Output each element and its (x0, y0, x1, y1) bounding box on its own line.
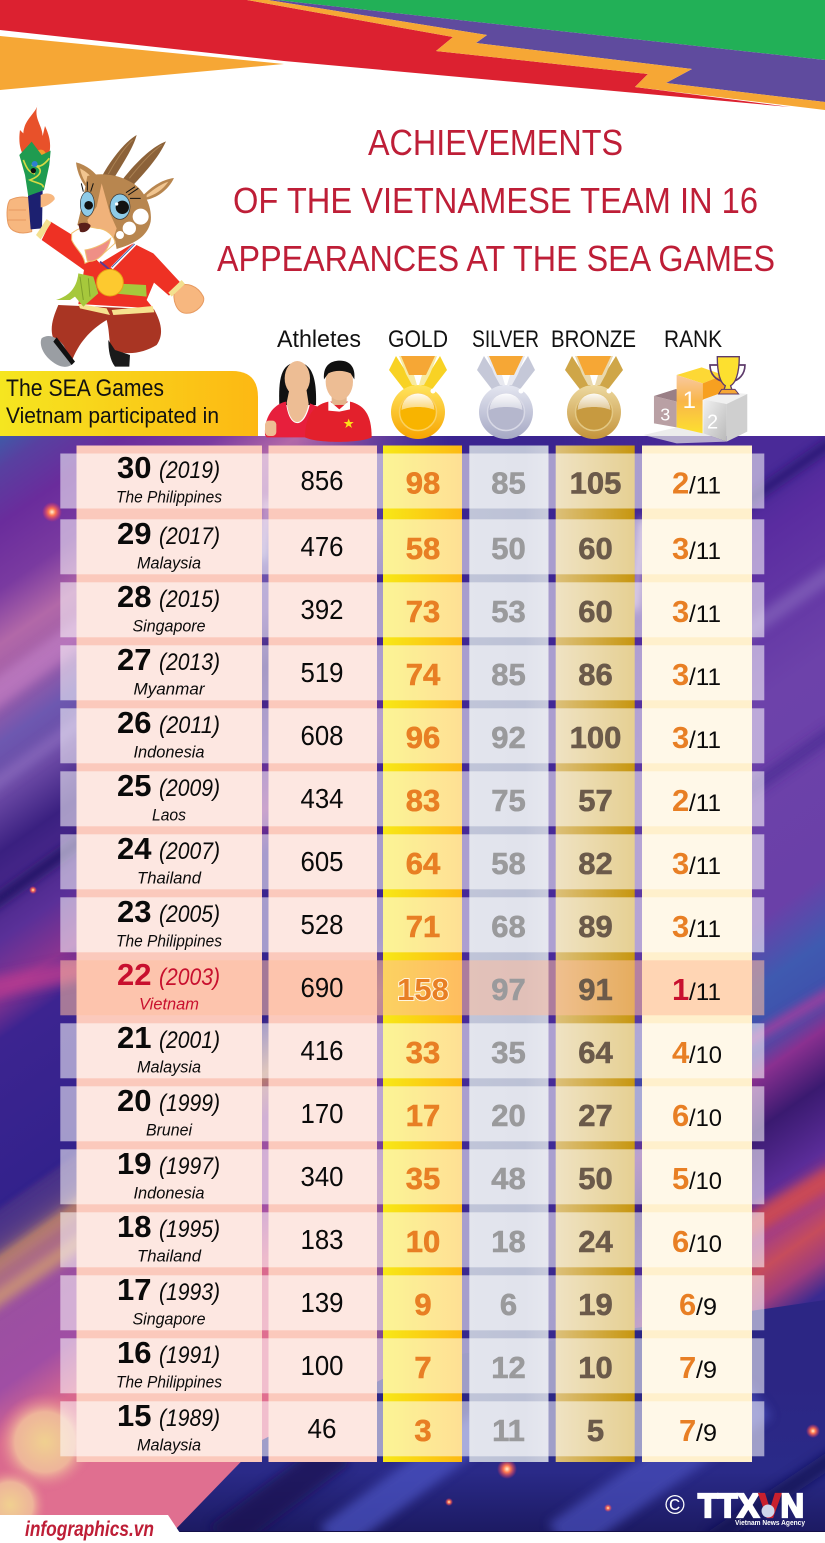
table row: 26 (2011): (2011) (159, 712, 220, 739)
table row: 16 (1991): /9 (696, 1357, 717, 1384)
table row: 30 (2019): 2 (672, 465, 689, 500)
label box: The SEA Games Vietnam participated in: The SEA Games (6, 375, 164, 402)
table row: 26 (2011): /11 (689, 727, 721, 754)
logo: copyright TTXVN Vietnam News Agency: Vietnam News Agency (735, 1518, 806, 1527)
table row: 24 (2007): 82 (578, 846, 613, 881)
table row: 22 (2003) highlighted host year: /11 (689, 979, 721, 1006)
table row: 24 (2007): 3 (672, 846, 689, 881)
icon: rank podium with trophy: 3 (660, 405, 670, 425)
logo: copyright TTXVN Vietnam News Agency: TTXVN (698, 1487, 804, 1524)
table row: 20 (1999) (117, 1083, 722, 1139)
table row: 16 (1991): 16 (117, 1335, 151, 1370)
table row: 21 (2001): 21 (117, 1020, 151, 1055)
background panel: purple diagonal light streaks (0, 436, 825, 1543)
table row: 18 (1995): 24 (578, 1224, 613, 1259)
table row: 30 (2019): /11 (689, 472, 721, 499)
table row: 16 (1991): (1991) (159, 1342, 220, 1369)
column headers: BRONZE (551, 326, 636, 353)
table row: 22 (2003) highlighted host year: 690 (300, 972, 344, 1003)
top banner: coloured diagonal stripes (0, 0, 825, 110)
table row: 20 (1999): 170 (300, 1098, 344, 1129)
table row: 30 (2019): 85 (491, 465, 526, 500)
table row: 19 (1997): 5 (672, 1161, 689, 1196)
table row: 22 (2003) highlighted host year: 97 (491, 972, 526, 1007)
table row: 19 (1997): 48 (491, 1161, 526, 1196)
table row: 21 (2001): 4 (672, 1035, 690, 1070)
panel: row bands (60, 454, 764, 1456)
table row: 19 (1997): 35 (406, 1161, 440, 1196)
table row: 17 (1993): 6 (500, 1287, 517, 1322)
table row: 23 (2005): 3 (672, 909, 689, 944)
table row: 17 (1993): 139 (300, 1287, 344, 1318)
table row: 25 (2009): 75 (491, 783, 526, 818)
table row: 15 (1989): 46 (308, 1413, 336, 1444)
table row: 15 (1989): /9 (696, 1420, 717, 1447)
icon: rank podium with trophy: 2 (707, 412, 718, 434)
table row: 23 (2005) (116, 894, 721, 950)
table row: 21 (2001): (2001) (159, 1027, 220, 1054)
table row: 30 (2019): 98 (406, 465, 440, 500)
table row: 24 (2007): (2007) (159, 838, 220, 865)
table row: 19 (1997): 340 (300, 1161, 344, 1192)
table row: 24 (2007): /11 (689, 853, 721, 880)
table row: 20 (1999): 6 (672, 1098, 689, 1133)
table row: 24 (2007): 605 (300, 846, 344, 877)
table row: 16 (1991): The Philippines (116, 1372, 222, 1391)
table row: 15 (1989): Malaysia (137, 1435, 201, 1454)
table row: 25 (2009): 83 (406, 783, 440, 818)
table row: 30 (2019): 30 (117, 450, 151, 485)
table row: 22 (2003) highlighted host year: 91 (578, 972, 613, 1007)
table row: 29 (2017): 476 (300, 531, 344, 562)
column headers: GOLD (388, 326, 448, 353)
logo: copyright TTXVN Vietnam News Agency (665, 1487, 806, 1527)
table row: 21 (2001): 33 (406, 1035, 440, 1070)
table row: 16 (1991): 10 (578, 1350, 613, 1385)
table row: 23 (2005): 89 (578, 909, 613, 944)
table row: 29 (2017) (117, 516, 721, 572)
table row: 21 (2001): 64 (578, 1035, 613, 1070)
table row: 30 (2019): (2019) (159, 457, 220, 484)
table row: 22 (2003) highlighted host year: 1 (672, 972, 689, 1007)
table row: 20 (1999): (1999) (159, 1090, 220, 1117)
table row: 19 (1997): 19 (117, 1146, 151, 1181)
table row: 27 (2013): 86 (578, 657, 613, 692)
icon: silver medal (477, 356, 535, 439)
table row: 17 (1993): /9 (696, 1294, 717, 1321)
table row: 29 (2017): 50 (491, 531, 526, 566)
column headers: Athletes (277, 326, 361, 353)
icon: rank podium with trophy: 1 (683, 387, 696, 414)
table row: 30 (2019) (116, 450, 721, 506)
table row: 18 (1995): 6 (672, 1224, 689, 1259)
table row: 21 (2001): 35 (491, 1035, 526, 1070)
table row: 26 (2011): 608 (300, 720, 344, 751)
table row: 18 (1995): (1995) (159, 1216, 220, 1243)
table row: 20 (1999): 17 (406, 1098, 440, 1133)
table row: 18 (1995): 18 (117, 1209, 151, 1244)
table row: 27 (2013): 27 (117, 642, 151, 677)
table row: 18 (1995): /10 (689, 1231, 722, 1258)
table row: 18 (1995): 10 (406, 1224, 440, 1259)
table row: 22 (2003) highlighted host year: 22 (117, 957, 151, 992)
table row: 24 (2007): Thailand (137, 868, 202, 887)
table row: 28 (2015): 53 (491, 594, 526, 629)
icon: bronze medal (565, 356, 623, 439)
table row: 27 (2013): 3 (672, 657, 689, 692)
table row: 17 (1993): Singapore (132, 1309, 206, 1328)
table row: 17 (1993): 6 (679, 1287, 696, 1322)
table row: 20 (1999): Brunei (146, 1120, 193, 1139)
table row: 17 (1993) (117, 1272, 717, 1328)
table row: 23 (2005): /11 (689, 916, 721, 943)
table row: 29 (2017): 58 (406, 531, 440, 566)
table row: 25 (2009): Laos (152, 805, 186, 824)
logo: copyright TTXVN Vietnam News Agency: © (665, 1490, 685, 1520)
table row: 28 (2015): 392 (300, 594, 344, 625)
table row: 24 (2007): 64 (406, 846, 441, 881)
table row: 19 (1997): 50 (578, 1161, 613, 1196)
table row: 19 (1997): (1997) (159, 1153, 220, 1180)
icon: athletes (265, 361, 372, 442)
table row: 28 (2015) (117, 579, 721, 635)
title: OF THE VIETNAMESE TEAM IN 16 (233, 180, 758, 221)
table row: 25 (2009): 57 (578, 783, 613, 818)
table row: 23 (2005): 68 (491, 909, 526, 944)
table row: 27 (2013) (117, 642, 721, 698)
table row: 20 (1999): 20 (491, 1098, 526, 1133)
table row: 25 (2009): 25 (117, 768, 151, 803)
table row: 26 (2011): 100 (570, 720, 621, 755)
icon: rank podium with trophy (643, 357, 747, 443)
table row: 26 (2011): 92 (491, 720, 526, 755)
table row: 21 (2001): /10 (689, 1042, 722, 1069)
table row: 30 (2019): The Philippines (116, 488, 222, 506)
table row: 21 (2001) (117, 1020, 722, 1076)
table row: 29 (2017): (2017) (159, 523, 220, 550)
table row: 18 (1995): Thailand (137, 1246, 202, 1265)
table row: 16 (1991): 12 (491, 1350, 526, 1385)
table row: 26 (2011): Indonesia (134, 742, 204, 761)
table row: 15 (1989): 3 (414, 1413, 432, 1448)
table row: 28 (2015): Singapore (132, 616, 206, 635)
table row: 22 (2003) highlighted host year (117, 957, 721, 1013)
footer tab: infographics.vn: infographics.vn (25, 1518, 154, 1541)
column headers (277, 326, 722, 353)
table row: 18 (1995): 18 (491, 1224, 526, 1259)
label box: The SEA Games Vietnam participated in: Vietnam participated in (6, 403, 219, 428)
table row: 16 (1991): 100 (300, 1350, 344, 1381)
table row: 25 (2009) (117, 768, 721, 824)
icon: gold medal (389, 356, 447, 439)
table row: 28 (2015): 28 (117, 579, 151, 614)
table row: 15 (1989): (1989) (159, 1405, 220, 1432)
table row: 25 (2009): 2 (672, 783, 689, 818)
table row: 19 (1997): /10 (689, 1168, 722, 1195)
table row: 22 (2003) highlighted host year: (2003) (159, 964, 220, 991)
table row: 17 (1993): 17 (117, 1272, 151, 1307)
table row: 23 (2005): (2005) (159, 901, 220, 928)
title: ACHIEVEMENTS (368, 122, 623, 163)
table row: 21 (2001): Malaysia (137, 1057, 201, 1076)
table row: 29 (2017): 3 (672, 531, 689, 566)
table row: 25 (2009): (2009) (159, 775, 220, 802)
column headers: SILVER (472, 326, 539, 353)
table row: 23 (2005): 528 (300, 909, 344, 940)
table row: 15 (1989): 11 (492, 1413, 525, 1448)
icon: mascot with torch (7, 105, 204, 367)
table row: 28 (2015): /11 (689, 601, 721, 628)
table row: 19 (1997) (117, 1146, 722, 1202)
table row: 24 (2007) (117, 831, 721, 887)
table row: 27 (2013): 74 (406, 657, 441, 692)
title: APPEARANCES AT THE SEA GAMES (217, 238, 775, 279)
table row: 15 (1989): 7 (679, 1413, 696, 1448)
table row: 20 (1999): 20 (117, 1083, 151, 1118)
table row: 24 (2007): 58 (491, 846, 526, 881)
table row: 28 (2015): (2015) (159, 586, 220, 613)
table row: 29 (2017): Malaysia (137, 553, 201, 572)
table row: 23 (2005): The Philippines (116, 931, 222, 950)
table row: 18 (1995): 183 (300, 1224, 344, 1255)
table row: 28 (2015): 60 (578, 594, 613, 629)
table row: 30 (2019): 105 (570, 465, 621, 500)
column headers: RANK (664, 326, 722, 353)
table row: 22 (2003) highlighted host year: 158 (397, 972, 449, 1007)
table row: 23 (2005): 23 (117, 894, 151, 929)
table row: 24 (2007): 24 (117, 831, 152, 866)
table row: 26 (2011): 3 (672, 720, 689, 755)
table row: 20 (1999): 27 (578, 1098, 613, 1133)
table row: 26 (2011): 96 (406, 720, 440, 755)
table row: 17 (1993): (1993) (159, 1279, 220, 1306)
table row: 22 (2003) highlighted host year: Vietnam (139, 994, 199, 1013)
table row: 20 (1999): /10 (689, 1105, 722, 1132)
table row: 28 (2015): 3 (672, 594, 689, 629)
table row: 15 (1989): 5 (587, 1413, 604, 1448)
table row: 27 (2013): 85 (491, 657, 526, 692)
table row: 15 (1989): 15 (117, 1398, 151, 1433)
table row: 25 (2009): 434 (300, 783, 344, 814)
table row: 23 (2005): 71 (406, 909, 440, 944)
table row: 16 (1991): 7 (414, 1350, 432, 1385)
table row: 25 (2009): /11 (689, 790, 721, 817)
table row: 29 (2017): /11 (689, 538, 721, 565)
table row: 26 (2011) (117, 705, 721, 761)
table row: 27 (2013): /11 (689, 664, 721, 691)
table row: 27 (2013): 519 (300, 657, 344, 688)
table row: 18 (1995) (117, 1209, 722, 1265)
title (217, 122, 775, 279)
table row: 30 (2019): 856 (300, 465, 344, 496)
table row: 29 (2017): 29 (117, 516, 151, 551)
table row: 27 (2013): Myanmar (134, 679, 206, 698)
table row: 29 (2017): 60 (578, 531, 613, 566)
table row: 16 (1991): 7 (679, 1350, 696, 1385)
table row: 26 (2011): 26 (117, 705, 151, 740)
table row: 28 (2015): 73 (406, 594, 440, 629)
table row: 17 (1993): 19 (578, 1287, 613, 1322)
table row: 17 (1993): 9 (414, 1287, 432, 1322)
table row: 15 (1989) (117, 1398, 717, 1454)
table row: 21 (2001): 416 (300, 1035, 344, 1066)
table row: 19 (1997): Indonesia (134, 1183, 204, 1202)
panel: table columns (76, 446, 752, 1462)
table row: 27 (2013): (2013) (159, 649, 220, 676)
label box: The SEA Games Vietnam participated in (0, 371, 258, 436)
table row: 16 (1991) (116, 1335, 717, 1391)
